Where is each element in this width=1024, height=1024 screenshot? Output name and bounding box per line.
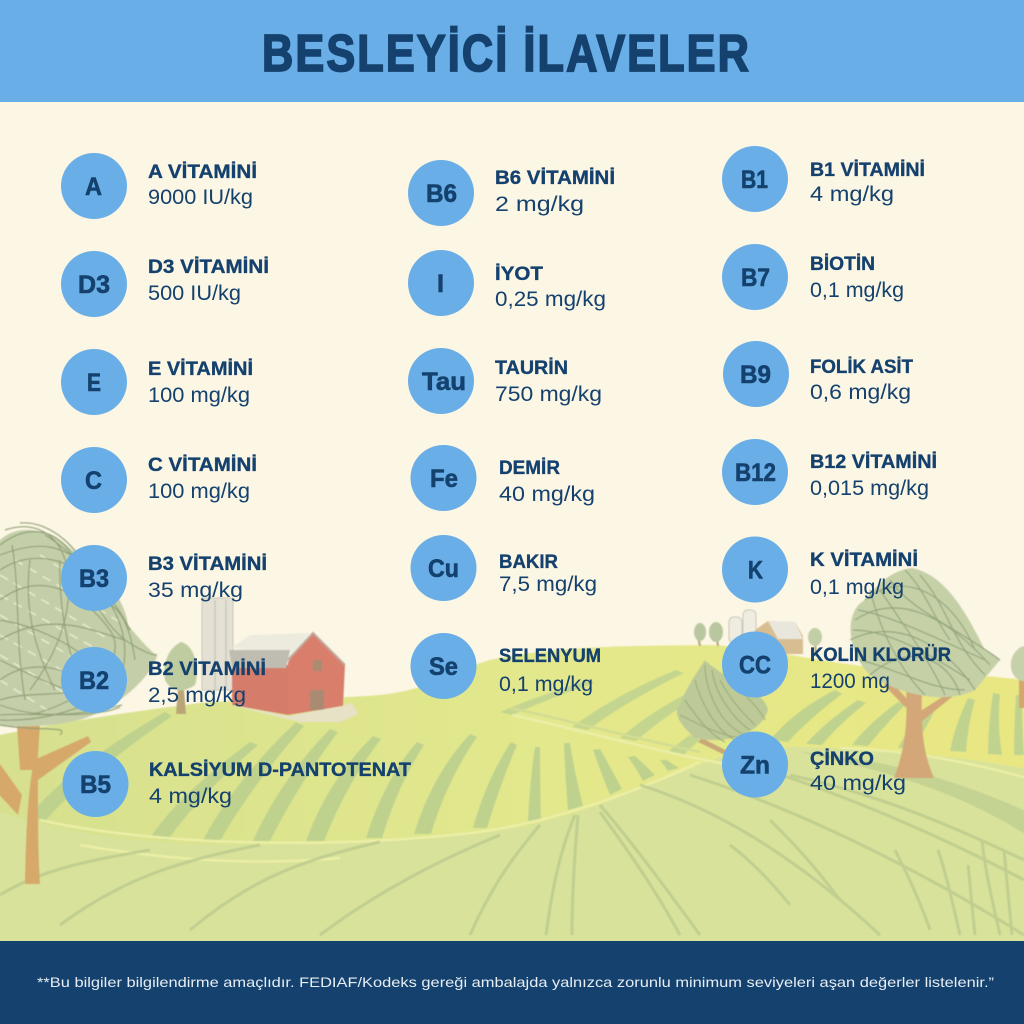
item: cinko: 40 mg/kg xyxy=(810,772,906,795)
item: B12 vitamini xyxy=(722,439,937,505)
header band xyxy=(0,0,1024,102)
item: cinko: ÇİNKO xyxy=(810,749,874,770)
footer band xyxy=(0,941,1024,1024)
item: kolin klorur: CC xyxy=(739,652,771,680)
item: cinko: Zn xyxy=(740,752,770,780)
item: B3 vitamini xyxy=(61,545,267,611)
shadow band near right tree xyxy=(800,752,1024,840)
item: B2 vitamini: 2,5 mg/kg xyxy=(148,684,246,707)
item: biotin: B7 xyxy=(741,264,770,292)
white hatching xyxy=(0,555,125,715)
item: iyot xyxy=(408,250,606,316)
left tree xyxy=(0,523,157,884)
track lines xyxy=(40,708,1024,862)
middle tree xyxy=(677,660,768,758)
item: folik asit: B9 xyxy=(740,361,771,389)
item: B6 vitamini xyxy=(408,160,615,226)
item: B12 vitamini: B12 VİTAMİNİ xyxy=(810,452,937,473)
item: C vitamini: C xyxy=(85,467,102,495)
item: selenyum: 0,1 mg/kg xyxy=(499,673,593,696)
red barn xyxy=(229,633,358,722)
illustration: farm landscape xyxy=(0,523,1024,950)
item: A vitamini: A VİTAMİNİ xyxy=(148,162,257,183)
right field stripes xyxy=(770,690,1024,755)
item: selenyum xyxy=(410,633,601,699)
item: A vitamini: A xyxy=(85,173,102,201)
item: C vitamini xyxy=(61,447,257,513)
item: demir: 40 mg/kg xyxy=(499,483,595,506)
item: taurin: TAURİN xyxy=(495,358,568,379)
item: folik asit: 0,6 mg/kg xyxy=(810,381,911,404)
title: BESLEYİCİ İLAVELER xyxy=(262,25,751,83)
item: B12 vitamini: 0,015 mg/kg xyxy=(810,477,929,500)
item: iyot: İYOT xyxy=(495,264,543,285)
item: bakir: Cu xyxy=(428,555,459,583)
lower field xyxy=(0,747,1024,950)
item: demir: Fe xyxy=(430,465,458,493)
item: iyot: I xyxy=(437,270,444,298)
item: D3 vitamini: 500 IU/kg xyxy=(148,282,241,305)
item: B3 vitamini: B3 VİTAMİNİ xyxy=(148,554,267,575)
item: B5 kalsiyum xyxy=(62,751,411,817)
item: cinko xyxy=(722,732,906,798)
item: E vitamini: E xyxy=(87,369,101,397)
scribble strokes xyxy=(0,523,157,735)
item: E vitamini: 100 mg/kg xyxy=(148,384,250,407)
item: B1 vitamini xyxy=(722,146,925,212)
item: B6 vitamini: 2 mg/kg xyxy=(495,193,584,216)
item: B12 vitamini: B12 xyxy=(735,459,776,487)
item: B5 kalsiyum: 4 mg/kg xyxy=(149,785,232,808)
item: K vitamini: K VİTAMİNİ xyxy=(810,550,918,571)
background tree near barn xyxy=(164,642,197,714)
item: C vitamini: C VİTAMİNİ xyxy=(148,455,257,476)
item: D3 vitamini: D3 xyxy=(78,271,110,299)
item: biotin: 0,1 mg/kg xyxy=(810,279,904,302)
left field stripes xyxy=(28,712,679,841)
item: selenyum: SELENYUM xyxy=(499,646,601,667)
item: B6 vitamini: B6 xyxy=(426,180,457,208)
item: D3 vitamini: D3 VİTAMİNİ xyxy=(148,257,269,278)
far right tree xyxy=(1011,646,1024,708)
item: demir: DEMİR xyxy=(499,458,560,479)
item: B5 kalsiyum: KALSİYUM D-PANTOTENAT xyxy=(149,760,411,781)
item: C vitamini: 100 mg/kg xyxy=(148,480,250,503)
item: B3 vitamini: B3 xyxy=(79,565,109,593)
item: bakir: BAKIR xyxy=(499,552,558,573)
item: iyot: 0,25 mg/kg xyxy=(495,288,606,311)
item: B1 vitamini: B1 xyxy=(741,166,768,194)
item: A vitamini: 9000 IU/kg xyxy=(148,186,253,209)
item: kolin klorur: KOLİN KLORÜR xyxy=(810,645,951,666)
item: bakir: 7,5 mg/kg xyxy=(499,573,597,596)
item: A vitamini xyxy=(61,153,257,219)
item: E vitamini: E VİTAMİNİ xyxy=(148,359,253,380)
item: B3 vitamini: 35 mg/kg xyxy=(148,579,243,602)
right tree xyxy=(850,568,1000,778)
item: B2 vitamini xyxy=(61,647,266,713)
item: taurin xyxy=(408,348,602,414)
item: E vitamini xyxy=(61,349,253,415)
rolling field xyxy=(0,645,1024,950)
item: biotin: BİOTİN xyxy=(810,254,875,275)
item: biotin xyxy=(722,244,904,310)
item: B1 vitamini: B1 VİTAMİNİ xyxy=(810,160,925,181)
distant farm xyxy=(694,610,822,656)
silo xyxy=(202,598,233,690)
item: bakir xyxy=(410,535,597,601)
furrow sketch lines xyxy=(0,768,1024,935)
item: folik asit xyxy=(723,341,913,407)
item: B2 vitamini: B2 xyxy=(79,667,109,695)
item: B1 vitamini: 4 mg/kg xyxy=(810,183,894,206)
footer disclaimer: **Bu bilgiler bilgilendirme amaçlıdır. FEDIAF/Kodeks gereği ambalajda yalnızca zorunlu minimum seviyeleri aşan değerler listelenir.” xyxy=(37,974,994,990)
item: kolin klorur xyxy=(722,632,951,698)
item: demir xyxy=(410,445,595,511)
item: D3 vitamini xyxy=(61,251,269,317)
item: B5 kalsiyum: B5 xyxy=(80,771,111,799)
item: taurin: 750 mg/kg xyxy=(495,383,602,406)
item: selenyum: Se xyxy=(429,653,458,681)
item: B6 vitamini: B6 VİTAMİNİ xyxy=(495,168,615,189)
item: taurin: Tau xyxy=(422,368,466,396)
item: K vitamini xyxy=(722,536,918,602)
item: folik asit: FOLİK ASİT xyxy=(810,357,913,378)
item: K vitamini: 0,1 mg/kg xyxy=(810,576,904,599)
item: kolin klorur: 1200 mg xyxy=(810,670,890,693)
item: B2 vitamini: B2 VİTAMİNİ xyxy=(148,659,266,680)
item: K vitamini: K xyxy=(748,556,763,584)
upper middle arcs xyxy=(500,670,700,755)
